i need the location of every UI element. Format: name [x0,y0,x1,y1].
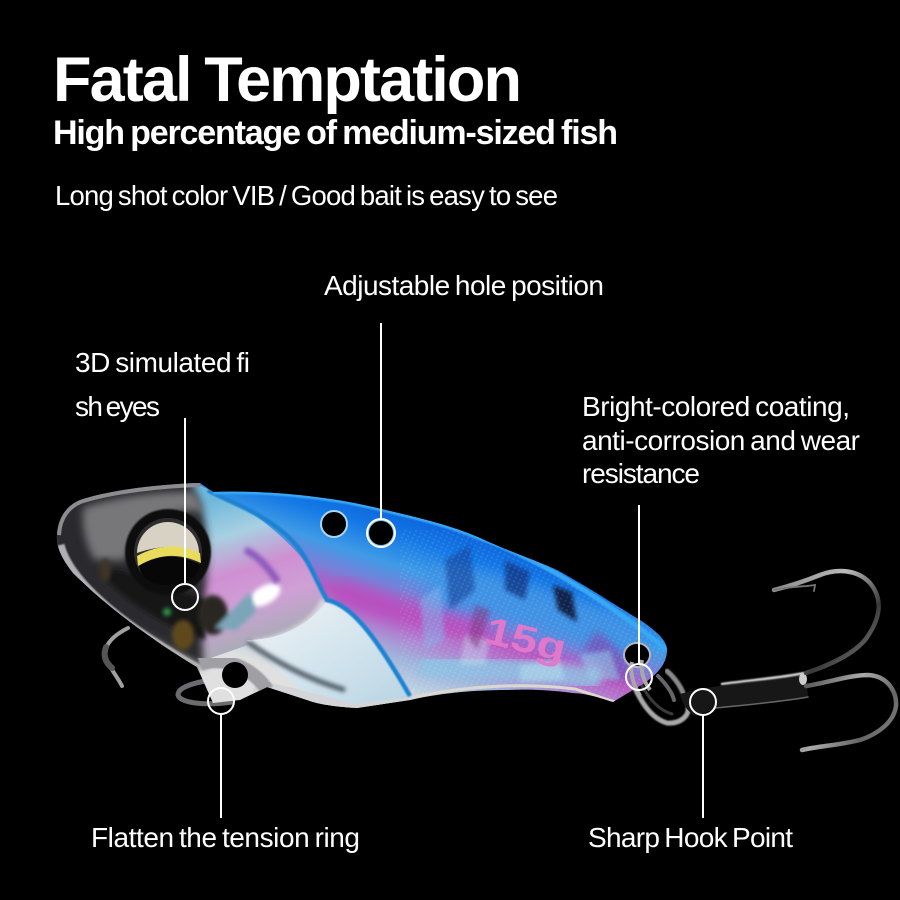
purple gill shadow [245,550,278,582]
iridescent gill patch [198,592,256,635]
pale cyan belly [420,665,600,680]
label: sharp hook point: Sharp Hook Point [588,822,793,853]
head gray patch [83,492,205,560]
label: bright-colored coating: resistance [582,458,700,489]
callout: coating [626,505,652,690]
callout: eye [172,418,198,610]
split rings [632,682,688,723]
label: 3D simulated fish eyes: 3D simulated fi [75,347,250,378]
tail base gradient [50,480,680,710]
lure body [40,480,680,710]
white gill highlight [250,581,283,609]
fin section [247,600,412,704]
label: 3D simulated fish eyes: sh eyes [75,391,160,422]
title: Fatal Temptation [53,45,522,115]
pink band [335,590,490,625]
callout: hole position [367,323,395,547]
line holes [222,511,650,688]
belly highlight [415,686,615,702]
label: bright-colored coating: anti-corrosion and wear [582,425,860,456]
upper barb [774,571,879,673]
subtitle: High percentage of medium-sized fish [53,114,618,152]
snap ring through tail [631,660,650,696]
iridescent flecks [99,558,194,650]
tail purple end [590,640,620,680]
tail texture [400,530,670,700]
callout: tension ring [208,688,234,818]
gill silver highlight [250,600,325,645]
label: 3D simulated fish eyes [75,347,250,422]
fin dark edge [248,642,345,690]
eye [125,509,211,595]
callout: hook point [690,689,716,818]
lower barb [802,675,896,750]
weight mark: 15g [481,610,571,671]
head rim [57,483,200,535]
label: flatten the tension ring: Flatten the tension ring [91,822,360,853]
blue edge [208,490,410,696]
label: bright-colored coating: Bright-colored coating, [582,391,850,422]
label: bright-colored coating [582,391,860,489]
label: adjustable hole position: Adjustable hole position [324,270,604,301]
dark head sides [100,570,205,640]
shank [680,672,808,716]
mid blue tail [430,585,640,640]
tail scale blotches [420,545,620,682]
treble hook [632,571,896,750]
tension ring and small hook [105,628,232,704]
tagline: Long shot color VIB / Good bait is easy to see [55,180,558,211]
head base [40,480,208,668]
gill section [190,483,325,658]
lower silver band [255,685,415,701]
